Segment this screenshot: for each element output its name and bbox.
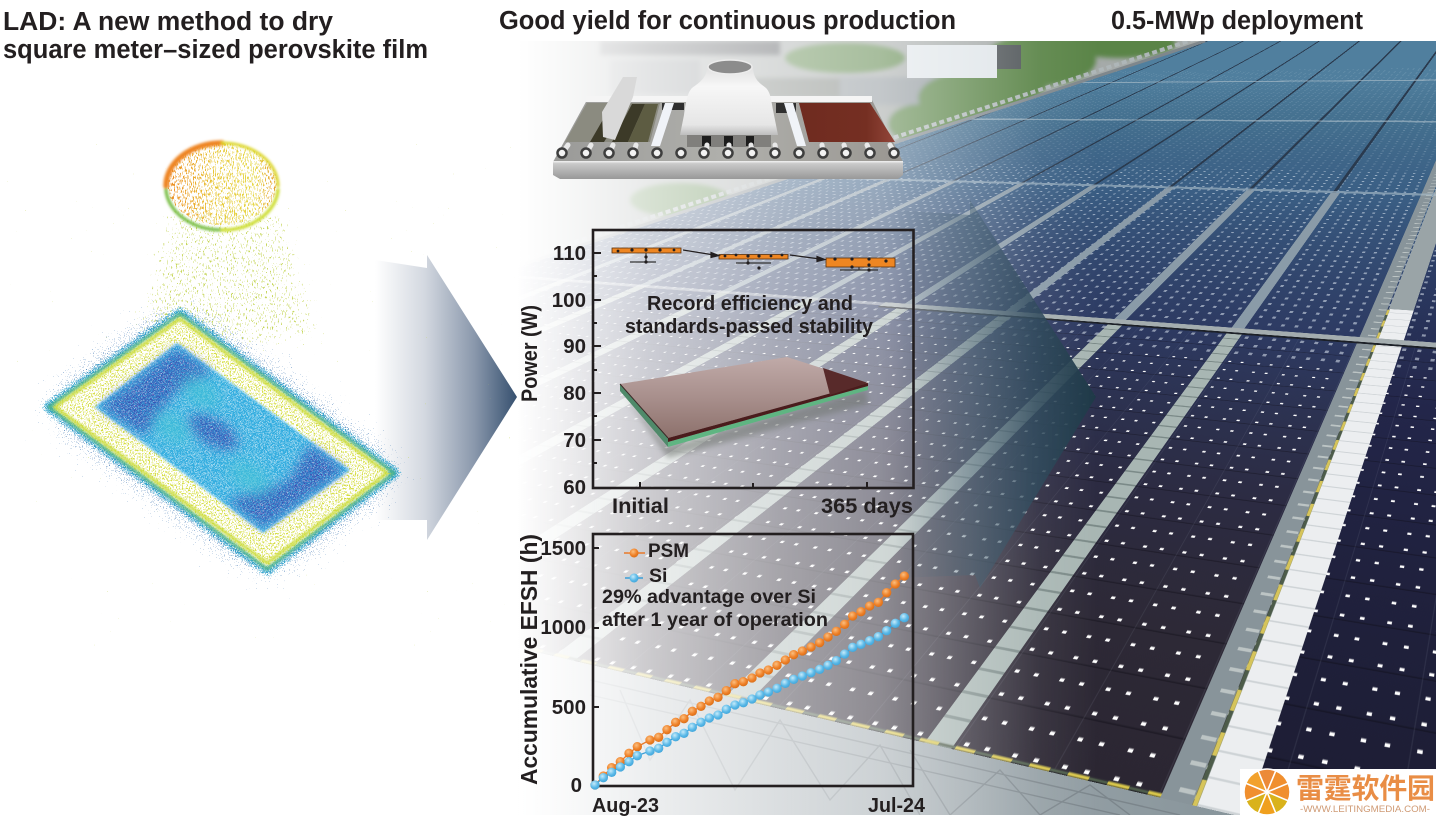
top rail: [586, 96, 872, 102]
y axis values: 110: [553, 242, 586, 265]
dark gaps in bed: [662, 103, 818, 113]
watermark name: 雷霆软件园: [1296, 773, 1435, 804]
legend: PSM: [624, 540, 689, 562]
white rollers: [651, 103, 674, 146]
y axis values: [552, 242, 586, 499]
y axis values: 60: [563, 476, 586, 499]
machine bed: [553, 100, 903, 162]
panel: rooftop photo of 0.5-MWp deployment: [518, 41, 1436, 815]
watermark url: -WWW.LEITINGMEDIA.COM-: [1300, 804, 1430, 815]
hood body: [680, 66, 778, 135]
particles: dark blue low-density regions: [100, 348, 345, 528]
slab left dark edge: [620, 384, 668, 438]
box middle: [719, 254, 788, 259]
window bars: [702, 136, 754, 146]
chart: accumulative EFSH: [516, 534, 926, 817]
slab top face: [620, 357, 868, 438]
chart annotation: [625, 293, 874, 338]
chart annotation: 29% advantage over Si: [602, 586, 816, 608]
legend: Si: Si: [649, 565, 667, 587]
chart annotation: after 1 year of operation: [602, 609, 828, 631]
coating blade: [602, 77, 637, 140]
icon: citrus wheel: [1244, 769, 1290, 815]
heading: LAD method: LAD: A new method to dry: [3, 8, 334, 36]
nozzle ring inner spray: [167, 143, 277, 225]
series: Si: [595, 618, 904, 785]
slab shadow layer: [622, 390, 868, 458]
roller end caps: [563, 145, 894, 152]
y ticks: [593, 253, 867, 488]
hood opening: [708, 60, 752, 74]
chart: module power, initial to 365 days: 365 days: [821, 494, 913, 518]
background buildings and trees behind the roof: [560, 41, 1200, 250]
roof edge railing: [508, 39, 1205, 266]
legend: Si: [625, 565, 667, 587]
heading: deployment: 0.5-MWp deployment: [1111, 7, 1363, 35]
nozzle ring: [166, 143, 278, 230]
chart: accumulative EFSH: Jul-24: [868, 795, 926, 817]
slab gloss corner: [823, 368, 868, 395]
particles: falling spray from nozzle: [135, 205, 325, 345]
y axis values: 1500: [540, 537, 586, 560]
chart annotation: [602, 586, 828, 631]
nozzle ring orange arc: [166, 143, 222, 186]
film interior white base: [50, 315, 393, 568]
slab green layer: [668, 386, 868, 447]
icon: slot-die coating machine with hood: [553, 60, 903, 179]
particles: yellow film frame: [50, 315, 393, 568]
box plots: [612, 248, 895, 272]
arrow: film to module (left gradient arrow): [375, 255, 517, 540]
chart frame: [593, 534, 913, 786]
y axis values: 90: [563, 335, 586, 358]
bed rollers: [558, 148, 898, 158]
trend arrows: [683, 250, 825, 262]
film inner yellow edge: [55, 319, 387, 563]
legend: PSM: PSM: [648, 540, 689, 562]
chart annotation: standards-passed stability: [625, 316, 874, 338]
chart frame: [593, 230, 914, 488]
nozzle ring lime arc: [222, 190, 278, 230]
data points: [617, 248, 888, 272]
heading: good yield: Good yield for continuous production: [499, 7, 956, 35]
heading: LAD method: square meter–sized perovskite film: [3, 36, 428, 64]
chart: module power, initial to 365 days: [517, 230, 914, 518]
whiskers: [630, 253, 878, 270]
data series: [595, 576, 904, 785]
y ticks: [593, 548, 599, 707]
window under the hood: [687, 135, 771, 147]
y axis values: 80: [563, 382, 586, 405]
machine base: [553, 161, 903, 179]
y axis values: 70: [563, 429, 586, 452]
heading: LAD method: [3, 8, 428, 64]
watermark background: [1240, 769, 1436, 815]
x axis labels: Initial: [612, 494, 669, 518]
icon: perovskite module slab: [620, 357, 868, 458]
nozzle ring yellow arc: [222, 143, 278, 186]
film stripes: [590, 104, 645, 142]
box 365 days: [826, 258, 895, 267]
x axis labels: Aug-23: [592, 795, 659, 817]
y axis values: 0: [571, 774, 582, 797]
box initial: [612, 248, 681, 253]
nozzle ring green arc: [166, 190, 222, 230]
chart annotation: Record efficiency and: [647, 293, 853, 315]
series: PSM: [595, 576, 904, 785]
particles: film edge halo: [45, 310, 398, 573]
red dried film on right: [799, 103, 895, 142]
particles: scatter halo around the film: [45, 310, 398, 573]
arrow: module to deployment (right gradient arrow): [895, 200, 1096, 588]
watermark: Leiting Media logo: [1240, 769, 1436, 815]
particles: cyan bright patches: [147, 370, 277, 502]
y axis title: Power (W): [517, 305, 542, 402]
particles: central cyan field: [95, 343, 350, 533]
slab dark edge: [668, 383, 868, 442]
y axis values: 1000: [540, 616, 586, 639]
panel: LAD drying particle simulation: [45, 143, 398, 573]
slab left side: [620, 384, 668, 447]
y axis values: [540, 537, 586, 797]
y axis values: 500: [552, 696, 586, 719]
y axis values: 100: [552, 289, 586, 312]
y axis title: Accumulative EFSH (h): [516, 534, 542, 785]
olive film on left: [565, 103, 660, 142]
film outer edge line: [49, 314, 394, 569]
